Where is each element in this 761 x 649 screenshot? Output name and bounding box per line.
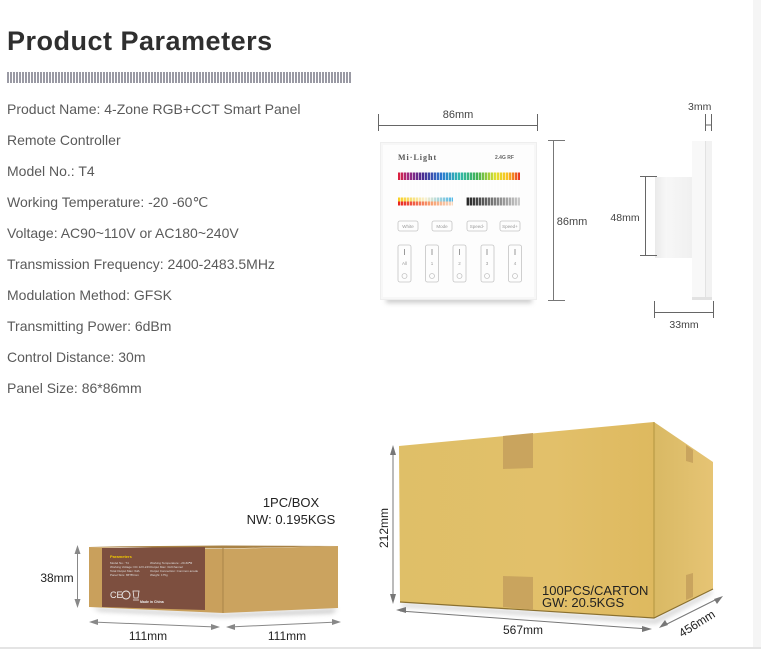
box label: CE [110, 590, 123, 600]
box label [102, 547, 205, 610]
spec list: Remote Controller [7, 132, 121, 148]
side view product image [655, 141, 712, 300]
dimension: 33mm [654, 301, 714, 331]
panel product image: 4 [514, 261, 517, 266]
dimension: panel height 86mm [548, 140, 587, 301]
dimension: 38mm: 38mm [40, 571, 74, 585]
dimension: 212mm [377, 445, 396, 604]
background strip [753, 0, 761, 649]
box label: Output Max: 3A/Channel [150, 565, 183, 569]
dimension: 456mm [659, 596, 723, 640]
panel product image: Mi·Light [398, 153, 437, 162]
dimension: box length 111mm [89, 619, 220, 643]
carton caption: 100PCS/CARTON [542, 583, 648, 598]
dimension: 456mm: 456mm [676, 607, 718, 640]
spec list: Panel Size: 86*86mm [7, 380, 142, 396]
dimension: 48mm: 48mm [610, 212, 640, 224]
dimension: 3mm: 3mm [688, 101, 712, 113]
dimension: 38mm [40, 545, 80, 608]
striped divider [7, 72, 352, 83]
panel product image: 2.4G RF [495, 155, 514, 161]
bottom rule [0, 647, 761, 649]
spec list: Product Name: 4-Zone RGB+CCT Smart Panel [7, 101, 300, 117]
spec list: Modulation Method: GFSK [7, 287, 172, 303]
spec list [7, 101, 300, 396]
box label: Panel Size: 86*86mm [110, 573, 139, 577]
box caption: NW: 0.195KGS [247, 512, 336, 527]
panel product image [380, 142, 536, 303]
small box [89, 546, 338, 617]
dimension: box width 111mm [226, 619, 341, 643]
title: Product Parameters [7, 26, 273, 56]
panel product image: White [402, 224, 414, 229]
panel product image: Mode [436, 224, 448, 229]
dimension: 3mm [688, 101, 712, 131]
dimension: panel width 86mm: 86mm [443, 109, 473, 121]
shipping carton [399, 422, 713, 624]
dimension: box length 111mm: 111mm [129, 629, 167, 643]
dimension: box width 111mm: 111mm [268, 629, 306, 643]
box caption [247, 495, 336, 527]
spec list: Transmitting Power: 6dBm [7, 318, 171, 334]
carton caption [542, 583, 648, 610]
dimension: 567mm: 567mm [503, 623, 543, 637]
carton caption: GW: 20.5KGS [542, 595, 624, 610]
box label: Made in China [140, 600, 164, 604]
panel product image: Speed+ [502, 224, 518, 229]
spec list: Model No.: T4 [7, 163, 95, 179]
spec list: Control Distance: 30m [7, 349, 146, 365]
box caption: 1PC/BOX [263, 495, 320, 510]
spec list: Transmission Frequency: 2400-2483.5MHz [7, 256, 275, 272]
spec list: Voltage: AC90~110V or AC180~240V [7, 225, 239, 241]
box label: Output Connection: Common anode [150, 569, 198, 573]
panel product image: All [402, 261, 407, 266]
box label: Weight: 175g [150, 573, 168, 577]
dimension: panel height 86mm: 86mm [557, 216, 587, 228]
dimension: 33mm: 33mm [669, 319, 699, 331]
panel product image: 3 [486, 261, 489, 266]
dimension: 48mm [610, 176, 657, 256]
spec list: Working Temperature: -20 -60℃ [7, 194, 208, 210]
panel product image: 2 [458, 261, 461, 266]
box label: Parameters [110, 554, 133, 559]
panel product image: 1 [431, 261, 434, 266]
box label: Working Temperature: -20-60℃ [150, 561, 193, 565]
dimension: panel width 86mm [378, 109, 538, 131]
box label: Total Output Max: 6dA [110, 569, 140, 573]
box label: Working Voltage: DC 12V-24V [110, 565, 150, 569]
dimension: 567mm [396, 607, 652, 637]
panel product image: Speed- [470, 224, 485, 229]
dimension: 212mm: 212mm [377, 508, 391, 548]
box label: Model No.: T4 [110, 561, 129, 565]
